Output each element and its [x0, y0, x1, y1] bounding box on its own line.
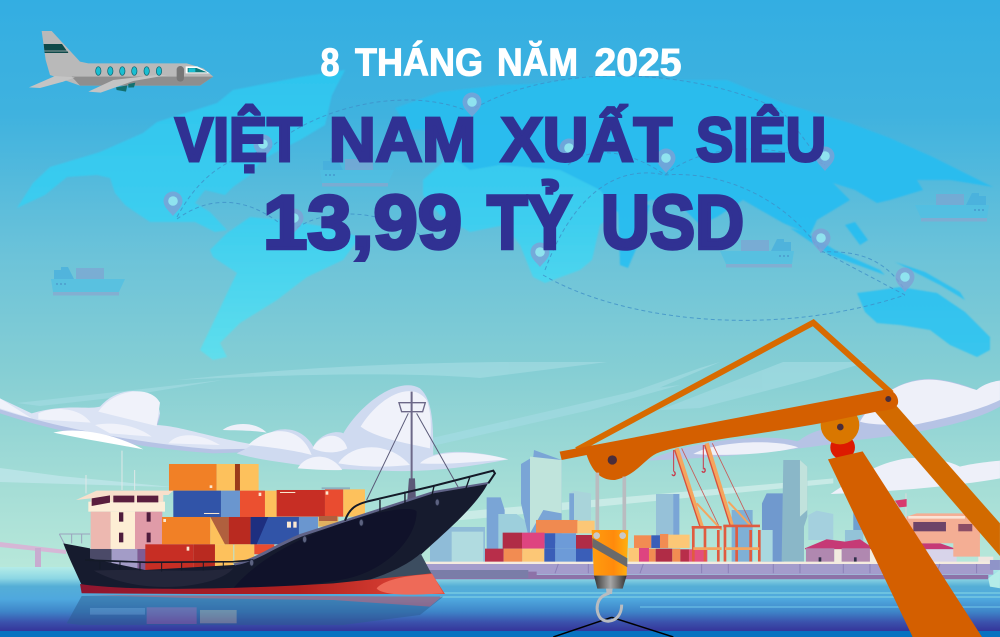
harbor crane foreground	[553, 323, 1000, 637]
quay	[423, 560, 1000, 588]
small cloud	[223, 424, 267, 433]
europe and africa	[423, 130, 625, 283]
title line 2: headline figure: USD	[601, 180, 744, 266]
container stacks	[485, 520, 707, 564]
rigging ropes	[553, 617, 673, 637]
crane top tie-bars	[577, 323, 892, 450]
asia	[395, 75, 993, 235]
boom beam	[560, 390, 898, 480]
stern rail	[59, 534, 90, 545]
red boot topping	[80, 573, 445, 594]
title line 1	[175, 106, 826, 175]
water	[0, 567, 1000, 631]
clouds	[0, 385, 508, 471]
deck containers	[145, 464, 365, 571]
title line 1: NAM	[329, 106, 476, 175]
location pins	[164, 92, 914, 292]
subtitle: period: 2025	[594, 42, 682, 85]
hook block	[592, 530, 628, 621]
sky streaks	[0, 362, 867, 487]
skyscrapers	[423, 450, 863, 564]
crane mast	[828, 451, 982, 637]
office building with flag	[895, 493, 993, 563]
pivot wheel	[821, 406, 859, 444]
islands	[618, 205, 965, 300]
mast and rigging	[367, 392, 458, 500]
title line 2: headline figure: TỶ	[487, 180, 572, 266]
airplane	[29, 31, 213, 93]
red joint	[830, 435, 855, 460]
crane rear leg	[875, 406, 1000, 556]
bottom band	[0, 631, 1000, 637]
title line 1: SIÊU	[696, 106, 826, 175]
right clouds behind crane	[647, 379, 1000, 494]
left cloud	[0, 391, 280, 453]
warehouses	[805, 539, 957, 563]
container ship	[59, 392, 495, 625]
hull	[63, 483, 488, 591]
harbor cranes	[672, 443, 760, 562]
title line 2: headline figure: 13,99	[263, 180, 462, 266]
boom pins	[608, 396, 891, 465]
route lines	[177, 76, 905, 320]
portholes	[250, 499, 439, 566]
world map	[17, 70, 993, 360]
distant bridge	[0, 542, 66, 571]
bridge house	[76, 451, 173, 571]
hull highlight band	[233, 482, 488, 565]
australia	[857, 287, 990, 357]
title line 1: VIỆT	[175, 106, 302, 175]
continents	[17, 70, 993, 360]
subtitle: period	[320, 41, 682, 85]
title line 2: headline figure	[263, 180, 744, 266]
railings	[85, 471, 495, 572]
cargo ships on map	[51, 158, 989, 296]
port and city skyline	[423, 443, 1000, 588]
water bands	[440, 592, 1000, 608]
mid cloud behind mast	[237, 385, 508, 471]
subtitle: period: THÁNG	[355, 41, 483, 85]
subtitle: period: 8	[320, 42, 340, 85]
crane cables	[597, 473, 624, 531]
subtitle: period: NĂM	[497, 41, 578, 85]
title line 1: XUẤT	[501, 106, 672, 175]
hull shading	[94, 568, 233, 587]
south america	[200, 217, 360, 360]
north america	[17, 70, 345, 232]
ship reflection	[67, 595, 443, 625]
